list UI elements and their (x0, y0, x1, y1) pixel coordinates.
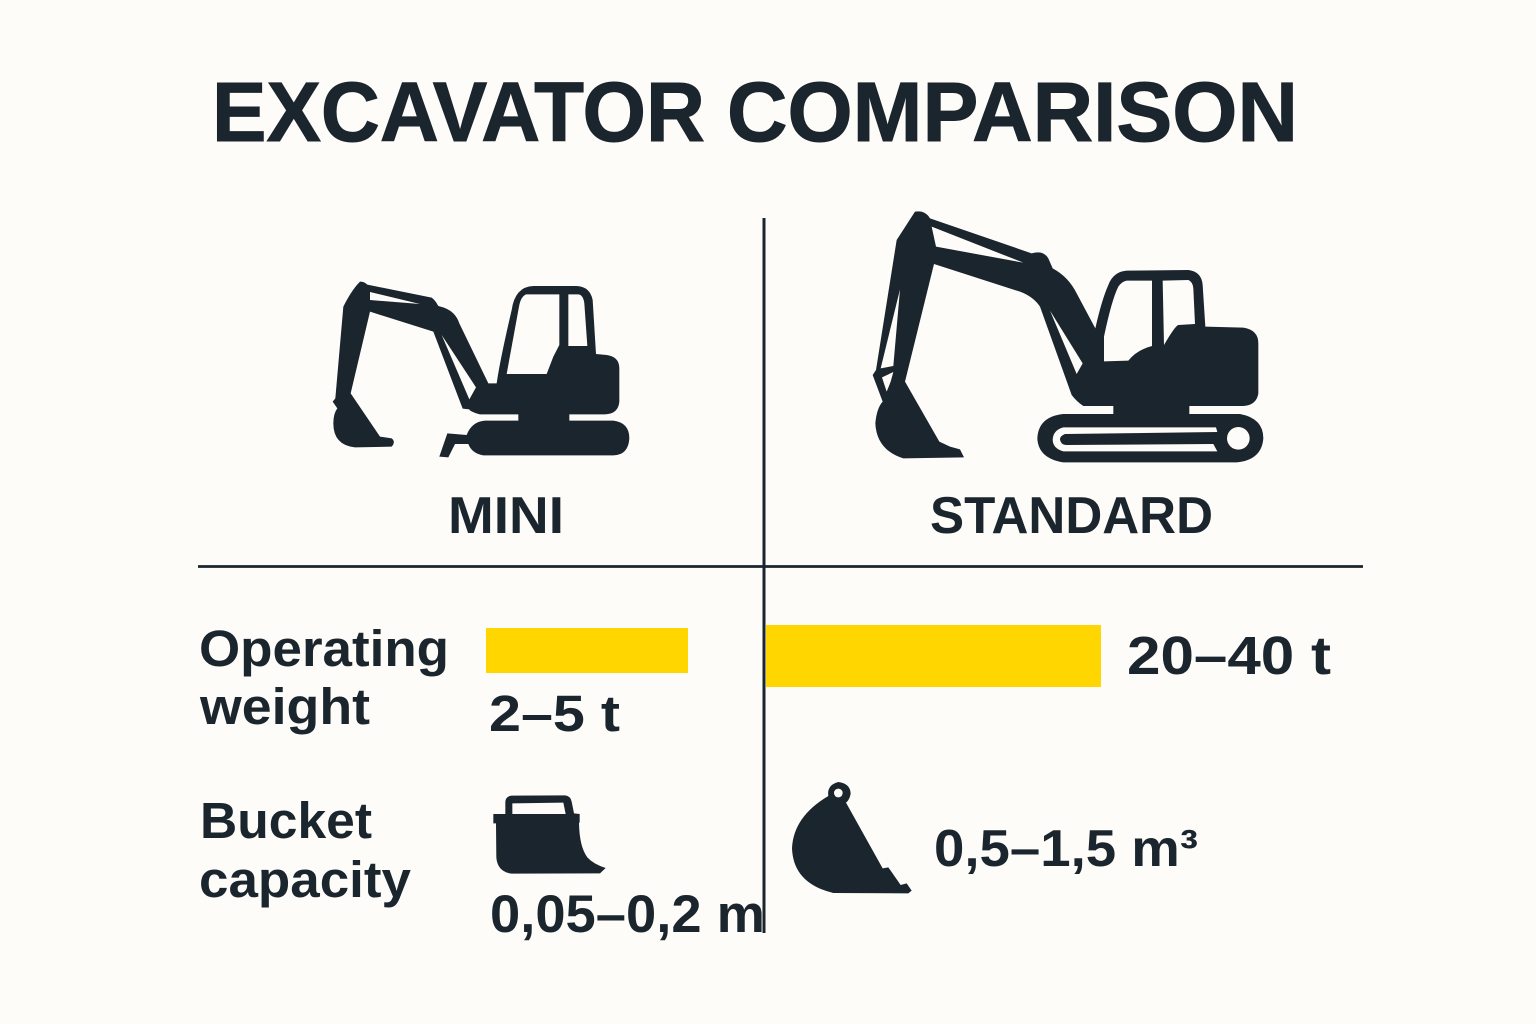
row label: bucket capacity: capacity (199, 851, 412, 908)
value: mini bucket: 0,05–0,2 m (490, 885, 765, 944)
cab windows (507, 294, 559, 374)
title (212, 65, 1298, 159)
row label: bucket capacity (199, 792, 412, 908)
row label: operating weight (199, 620, 449, 735)
icon: standard excavator (873, 211, 1263, 462)
boom gap (932, 227, 1023, 263)
row label: operating weight: Operating (199, 620, 449, 677)
label: standard: STANDARD (930, 487, 1213, 545)
bucket pin hole (834, 789, 843, 797)
bar: mini operating weight (486, 628, 688, 673)
icon: mini bucket (493, 795, 606, 874)
cab windows (1104, 281, 1152, 361)
value: standard bucket: 0,5–1,5 m³ (934, 820, 1198, 878)
row label: bucket capacity: Bucket (200, 792, 372, 849)
track opening (1053, 427, 1217, 451)
label: mini: MINI (448, 487, 564, 545)
bucket handle opening (512, 803, 566, 814)
icon: standard bucket (792, 782, 912, 893)
bar: standard operating weight (766, 625, 1101, 687)
title: COMPARISON (727, 65, 1298, 159)
value: standard weight: 20–40 t (1127, 626, 1331, 686)
icon: mini excavator (333, 282, 629, 457)
title: EXCAVATOR (212, 65, 705, 159)
row label: operating weight: weight (199, 678, 370, 735)
value: mini weight: 2–5 t (489, 685, 620, 742)
